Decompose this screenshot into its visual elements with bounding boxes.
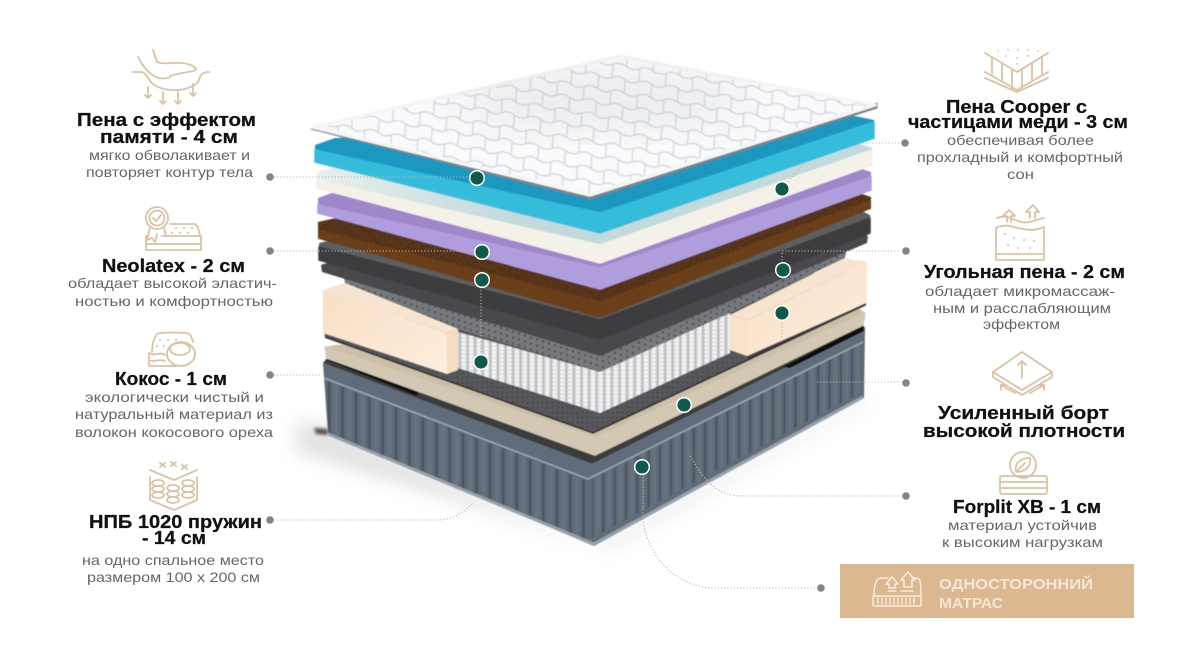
icon: reinforced border xyxy=(993,352,1052,395)
text: charcoal foam: ным и расслабляющим xyxy=(933,300,1111,316)
text: reinforced border: Усиленный борт xyxy=(938,402,1109,423)
leader lines xyxy=(274,143,901,588)
text: coconut: волокон кокосового ореха xyxy=(75,424,273,440)
quilted top cover xyxy=(311,56,877,199)
text: memory foam: мягко обволакивает и xyxy=(89,147,250,163)
bottom perforated felt xyxy=(324,270,865,433)
floor shadow xyxy=(296,398,868,550)
text: Forplit: материал устойчив xyxy=(948,517,1097,533)
text: springs: - 14 см xyxy=(142,527,206,548)
icon: pocket springs xyxy=(150,462,197,510)
text: Cooper foam: обеспечивая более xyxy=(947,132,1094,148)
text: Cooper foam: прохладный и комфортный xyxy=(917,149,1123,165)
text: springs: НПБ 1020 пружин xyxy=(89,511,262,532)
right firm foam block xyxy=(730,258,867,358)
icon: coconut xyxy=(149,332,195,366)
text: Neolatex: Neolatex - 2 см xyxy=(102,255,245,276)
text: springs xyxy=(82,511,264,585)
text: Cooper foam xyxy=(908,96,1128,182)
mattress base with reinforced border xyxy=(323,325,865,546)
text: Neolatex: обладает высокой эластич- xyxy=(68,275,277,291)
text: Cooper foam: сон xyxy=(1007,166,1034,182)
banner text xyxy=(939,575,1093,612)
text: Cooper foam: Пена Cooper с xyxy=(946,96,1087,117)
icon: leaf and Forplit layers xyxy=(1000,452,1047,494)
banner: one-sided mattress xyxy=(840,564,1134,618)
text: memory foam: памяти - 4 см xyxy=(100,126,238,147)
charcoal foam layer xyxy=(319,205,870,339)
banner text: МАТРАС xyxy=(939,595,1003,612)
coconut layer xyxy=(318,190,871,317)
text: coconut: экологически чистый и xyxy=(85,389,264,405)
pocket springs xyxy=(458,313,730,413)
text: reinforced border xyxy=(923,402,1125,441)
gray perforated surface above springs xyxy=(340,230,850,372)
icon: honeycomb foam xyxy=(985,50,1048,92)
banner text: ОДНОСТОРОННИЙ xyxy=(939,575,1093,593)
text: Neolatex: ностью и комфортностью xyxy=(75,293,273,309)
text: springs: размером 100 х 200 см xyxy=(87,569,260,585)
icon: one-sided mattress xyxy=(873,572,921,606)
text: Forplit: к высоким нагрузкам xyxy=(942,534,1103,550)
Forplit layer xyxy=(325,305,865,455)
text: coconut xyxy=(75,368,273,440)
text: charcoal foam: обладает микромассаж- xyxy=(925,283,1115,299)
text: memory foam xyxy=(77,109,256,180)
purple Neolatex layer xyxy=(318,165,871,289)
text: Forplit xyxy=(942,496,1103,550)
text: charcoal foam xyxy=(924,261,1125,332)
text: charcoal foam: Угольная пена - 2 см xyxy=(924,261,1125,282)
text: springs: на одно спальное место xyxy=(82,552,264,568)
icon: charcoal foam wave xyxy=(996,205,1044,260)
dark perforated band xyxy=(321,232,868,356)
icon: hand pressing memory foam xyxy=(133,50,209,104)
speckled memory foam layer xyxy=(317,140,872,263)
text: coconut: Кокос - 1 см xyxy=(115,368,227,389)
text: Forplit: Forplit XB - 1 см xyxy=(953,496,1101,517)
text: reinforced border: высокой плотности xyxy=(923,420,1125,441)
green marker dots xyxy=(470,171,790,474)
text: Cooper foam: частицами меди - 3 см xyxy=(908,111,1128,132)
text: memory foam: повторяет контур тела xyxy=(86,164,253,180)
text: memory foam: Пена с эффектом xyxy=(77,109,256,130)
icon: rosette and mattress xyxy=(146,207,201,250)
left firm foam block xyxy=(323,283,458,374)
blue Cooper foam layer xyxy=(315,115,874,233)
mattress illustration xyxy=(296,56,877,550)
gray callout dots xyxy=(266,139,910,592)
text: coconut: натуральный материал из xyxy=(75,406,273,422)
text: charcoal foam: эффектом xyxy=(983,316,1060,332)
text: Neolatex xyxy=(68,255,277,309)
